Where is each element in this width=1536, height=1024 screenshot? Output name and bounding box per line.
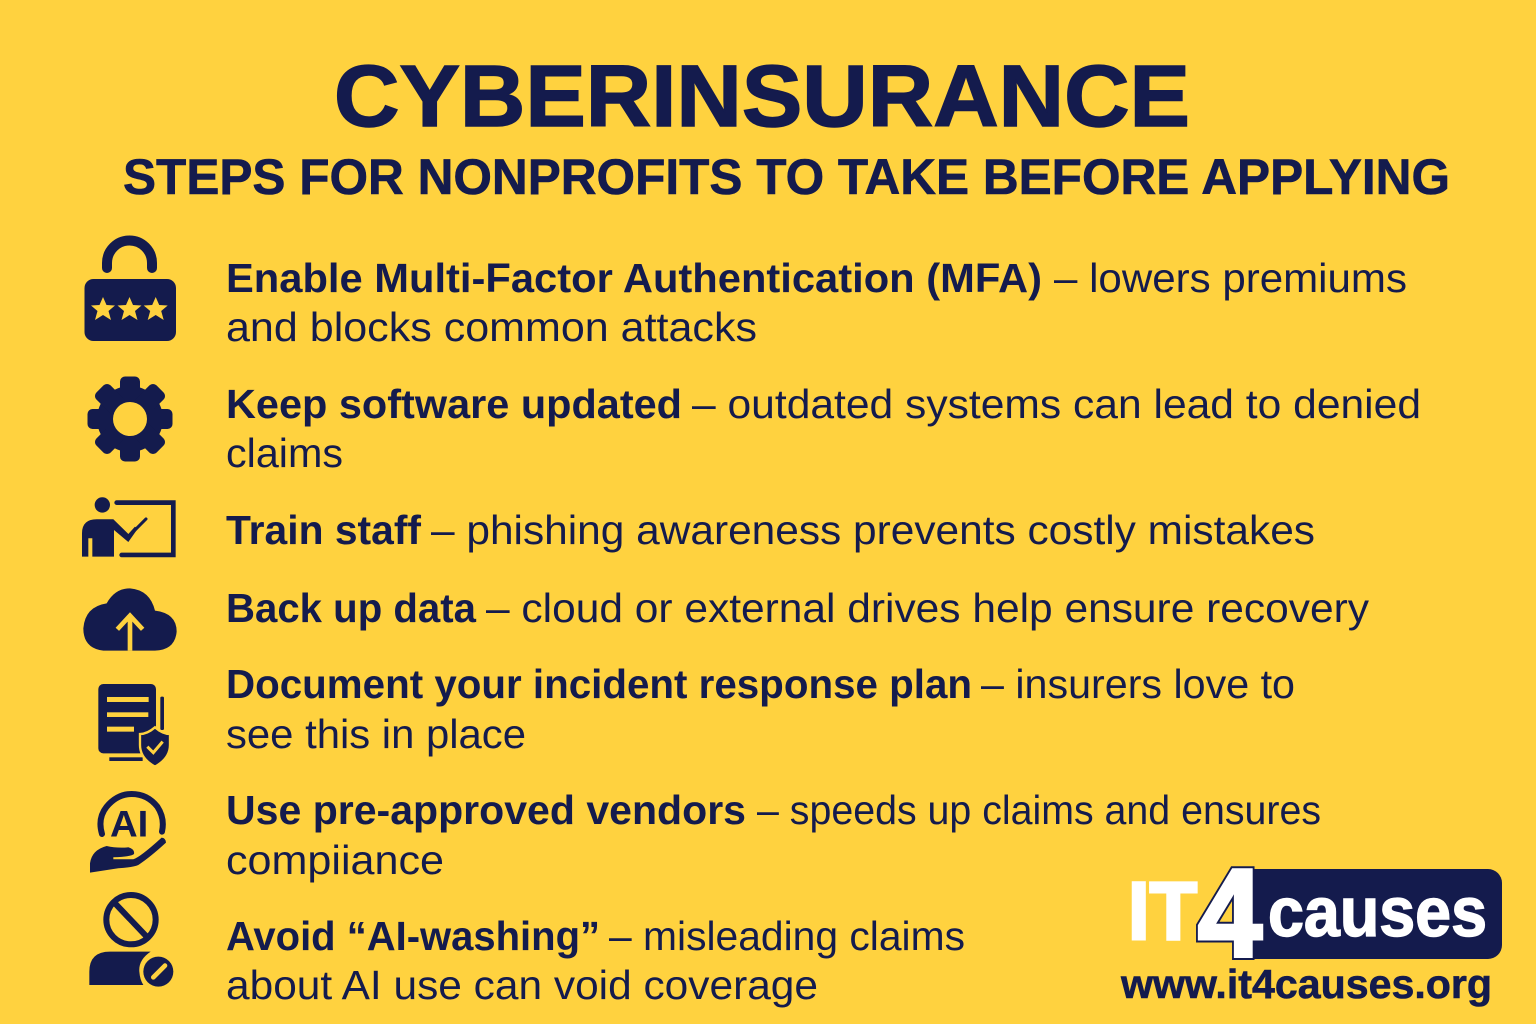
text: AI-washing step: – misleading claims	[609, 913, 965, 959]
text: training step: – phishing awareness prevents costly mistakes	[431, 507, 1315, 553]
text: vendors step: – speeds up claims and ensures	[757, 787, 1321, 833]
text: incident plan step	[226, 661, 1295, 757]
logo: IT4causes: 4	[1198, 845, 1262, 983]
text: software step	[226, 381, 1421, 476]
text: incident plan step: Document your incident response plan	[226, 661, 972, 707]
icon: trainer at board	[82, 497, 173, 557]
text: vendors step: compiiance	[226, 837, 444, 883]
icon: AI in hand	[90, 794, 166, 873]
step 6: pre-approved vendors	[90, 787, 1321, 883]
text: backup step: Back up data	[226, 585, 477, 631]
step 5: incident response plan	[98, 661, 1295, 767]
text: software step: Keep software updated	[226, 381, 682, 427]
step 7: avoid AI-washing	[89, 895, 965, 1008]
text: AI-washing step	[226, 913, 965, 1008]
step 4: back up data	[83, 585, 1370, 651]
icon: password padlock	[84, 241, 176, 341]
icon: AI in hand: AI	[110, 803, 148, 845]
text: software step: – outdated systems can lead to denied	[692, 381, 1421, 427]
icon: prohibited person	[89, 895, 173, 987]
text: incident plan step: see this in place	[226, 711, 526, 757]
text: incident plan step: – insurers love to	[981, 661, 1295, 707]
logo: IT4causes: IT	[1128, 866, 1197, 957]
logo: IT4causes: 4	[1198, 845, 1262, 983]
text: MFA step: – lowers premiums	[1054, 255, 1407, 301]
text: training step: Train staff	[226, 507, 421, 553]
text: vendors step	[226, 787, 1321, 883]
icon: gear	[88, 376, 172, 462]
text: MFA step	[226, 255, 1407, 350]
text: MFA step: and blocks common attacks	[226, 304, 757, 350]
text: AI-washing step: about AI use can void coverage	[226, 962, 818, 1008]
text: vendors step: Use pre-approved vendors	[226, 787, 746, 833]
website url: www.it4causes.org	[1120, 961, 1492, 1007]
icon: cloud upload	[83, 588, 177, 651]
text: software step: claims	[226, 430, 343, 476]
logo: IT4causes: causes	[1268, 873, 1487, 951]
step 3: train staff	[82, 497, 1315, 557]
title: CYBERINSURANCE	[334, 48, 1190, 145]
logo: IT4causes	[1128, 845, 1502, 983]
icon: document with shield	[98, 684, 170, 767]
text: AI-washing step: Avoid “AI-washing”	[226, 913, 600, 959]
step 2: keep software updated	[88, 376, 1421, 476]
step 1: enable MFA	[84, 241, 1407, 350]
text: MFA step: Enable Multi-Factor Authentication (MFA)	[226, 255, 1042, 301]
text: backup step: – cloud or external drives help ensure recovery	[486, 585, 1370, 631]
subtitle: STEPS FOR NONPROFITS TO TAKE BEFORE APPLYING	[123, 149, 1450, 205]
